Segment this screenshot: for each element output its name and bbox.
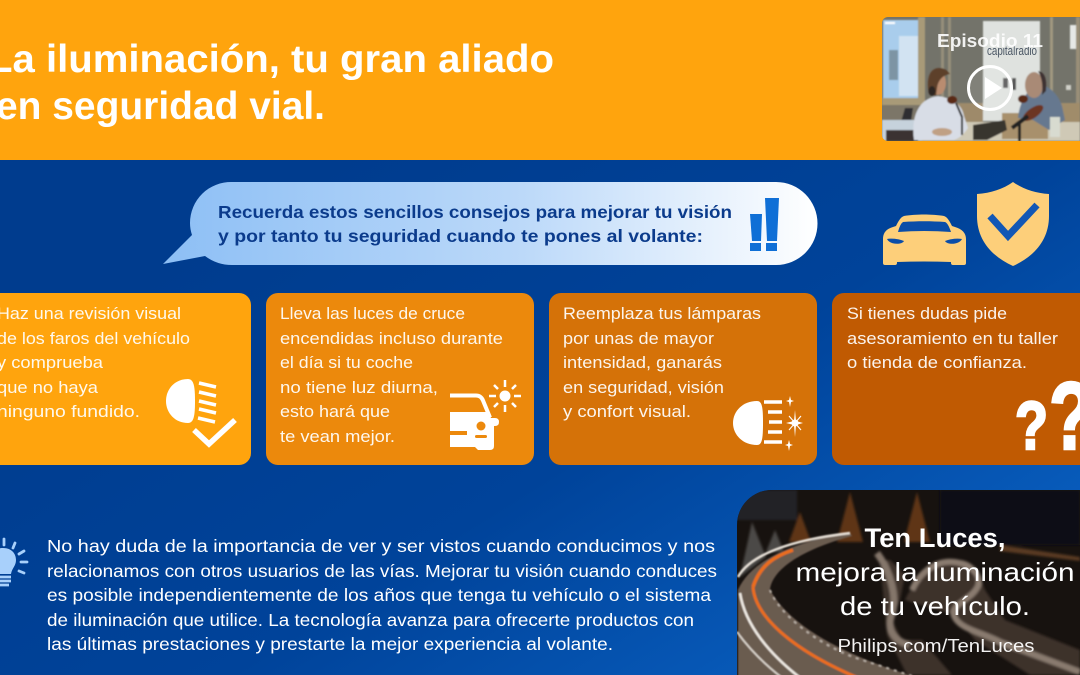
card 3 text: en seguridad, visión <box>563 378 724 397</box>
highway surface <box>738 533 925 675</box>
card 4 text: Si tienes dudas pide <box>847 304 1007 323</box>
icon: shield with check <box>977 182 1049 266</box>
body paragraph <box>47 536 717 654</box>
card 1 text <box>0 304 190 421</box>
header band <box>0 0 1080 160</box>
light trails <box>738 533 850 577</box>
background: blue panel <box>0 160 1080 675</box>
panel: card 3 <box>549 293 817 465</box>
card 4 text: asesoramiento en tu taller <box>847 329 1058 348</box>
icon: headlamp with check <box>166 379 235 444</box>
icon: car with sun <box>450 380 521 450</box>
body paragraph: es posible independientemente de los años que tenga tu vehículo o el sistema <box>47 585 711 605</box>
bubble text: y por tanto tu seguridad cuando te pones al volante: <box>218 226 703 246</box>
card 3 text <box>563 304 761 421</box>
card 2 text: encendidas incluso durante <box>280 329 503 348</box>
bubble text <box>218 202 732 246</box>
photo panel: Ten Luces <box>737 490 1080 675</box>
card 4 text: o tienda de confianza. <box>847 353 1027 372</box>
video thumbnail: Episodio 11 <box>882 17 1080 141</box>
play button <box>968 66 1012 110</box>
card 2 text <box>280 304 503 446</box>
body paragraph: relacionamos con otros usuarios de las vías. Mejorar tu visión cuando conduces <box>47 561 717 581</box>
icon: question marks: ? <box>1015 388 1048 464</box>
icon: car <box>883 214 966 265</box>
icon: light bulb <box>0 539 27 585</box>
card 1 text: ninguno fundido. <box>0 402 140 421</box>
photo caption: Ten Luces, <box>864 523 1006 553</box>
card 2 text: Lleva las luces de cruce <box>280 304 465 323</box>
card 3 text: Reemplaza tus lámparas <box>563 304 761 323</box>
body paragraph: No hay duda de la importancia de ver y ser vistos cuando conducimos y nos <box>47 536 715 556</box>
body paragraph: de iluminación que utilice. La tecnología avanza para ofrecerte productos con <box>47 610 694 630</box>
card 2 text: te vean mejor. <box>280 427 395 446</box>
icon: headlamp with sparkles <box>733 396 803 451</box>
panel: card 2 <box>266 293 534 465</box>
photo caption <box>796 523 1074 656</box>
serpentine road <box>877 553 1080 672</box>
card 1 text: Haz una revisión visual <box>0 304 181 323</box>
title: La iluminación, tu gran aliado <box>0 38 554 81</box>
card 1 text: de los faros del vehículo <box>0 329 190 348</box>
panel: card 4 <box>832 293 1080 470</box>
photo caption: de tu vehículo. <box>840 591 1030 621</box>
episode label: Episodio 11 <box>937 31 1043 51</box>
title <box>0 38 554 128</box>
card 4 text <box>847 304 1058 372</box>
card 3 text: y confort visual. <box>563 402 691 421</box>
capital radio logo text: capitalradio <box>987 43 1037 58</box>
card 2 text: el día si tu coche <box>280 353 413 372</box>
icon: exclamation marks <box>750 198 779 251</box>
photo caption: mejora la iluminación <box>796 557 1074 587</box>
body paragraph: las últimas prestaciones y prestarte la mejor experiencia al volante. <box>47 634 613 654</box>
panel: card 1 <box>0 293 251 465</box>
card 2 text: esto hará que <box>280 402 390 421</box>
speech bubble <box>163 182 818 265</box>
bubble text: Recuerda estos sencillos consejos para mejorar tu visión <box>218 202 732 222</box>
title: en seguridad vial. <box>0 85 325 128</box>
card 2 text: no tiene luz diurna, <box>280 378 438 397</box>
card 3 text: intensidad, ganarás <box>563 353 722 372</box>
icon: question marks <box>1015 363 1080 470</box>
photo caption: Philips.com/TenLuces <box>838 636 1034 656</box>
card 3 text: por unas de mayor <box>563 329 714 348</box>
